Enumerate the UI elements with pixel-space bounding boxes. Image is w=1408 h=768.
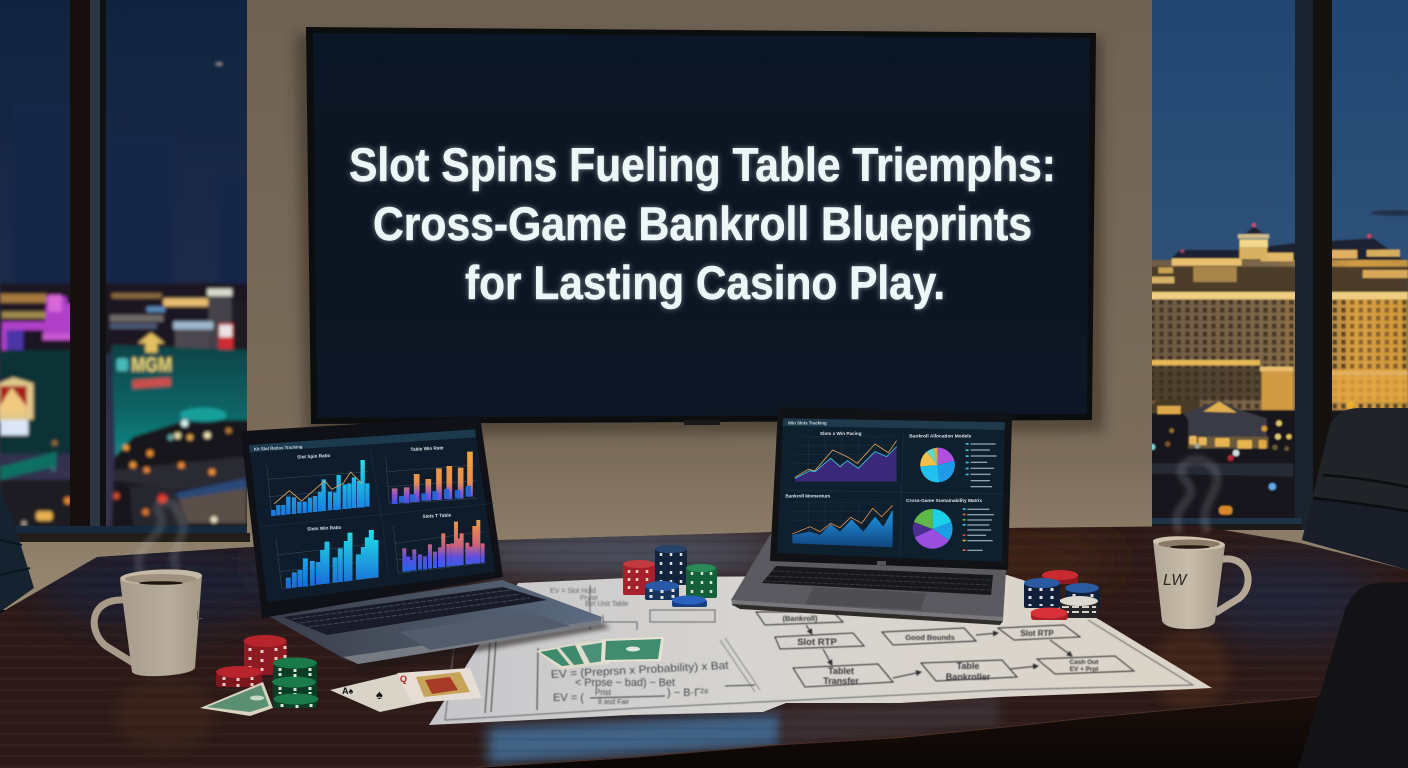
pie chart: allocation (909, 434, 997, 487)
blueprint formulas: 8 asd Fair (598, 699, 630, 706)
flowchart (756, 612, 1134, 687)
playing cards fan (536, 637, 664, 669)
line chart: spins: Slots x Win Pacing (820, 431, 862, 436)
pie chart: sustainability (906, 498, 994, 551)
title (349, 138, 1056, 309)
left window frame (0, 0, 250, 542)
coffee mug right: LW (1163, 572, 1188, 589)
background wall (0, 0, 1408, 610)
steam left (138, 502, 183, 572)
laptop right (731, 407, 1012, 625)
left window with MGM night view (0, 0, 253, 533)
title: for Lasting Casino Play. (465, 256, 945, 309)
chart: table wins: Table Win Rate (410, 445, 444, 452)
left casino sign (0, 377, 33, 435)
blueprint formulas: Prist (595, 688, 612, 697)
lower right chair (1298, 582, 1408, 768)
blueprint paper: Slot RTP (797, 637, 837, 648)
right upper chair (1302, 408, 1408, 570)
right window frame (1152, 0, 1332, 530)
steam right (1177, 459, 1217, 532)
blueprint formulas: EV = (Preprsn x Probability) x Bat (551, 660, 729, 681)
right chip stacks (1024, 570, 1100, 620)
table cards: Q (400, 674, 407, 684)
MGM lion sign (117, 333, 172, 389)
line chart: spins (795, 431, 897, 482)
left chair (0, 490, 34, 612)
MGM lion sign: MGM (131, 354, 172, 376)
wall display screen (306, 27, 1096, 425)
blueprint top-left notes (550, 585, 715, 630)
title: Slot Spins Fueling Table Triemphs: (349, 138, 1056, 191)
pie chart: allocation: Bankroll Allocation Models (909, 434, 972, 439)
pie chart: sustainability: Cross-Game Sustainability Matrix (906, 498, 982, 503)
table cards (200, 668, 482, 716)
chart: blue bars (276, 525, 379, 589)
right laptop keyboard (762, 566, 993, 595)
chart: blue bars: Slots Win Ratio (307, 525, 342, 532)
laptop left: Kit Slot Ratios Tracking (254, 444, 303, 452)
line chart: bankroll: Bankroll Momentum (785, 494, 830, 499)
blueprint top-left notes: Pryse (580, 595, 598, 602)
blueprint paper: EV + Prpl (1070, 666, 1099, 673)
blueprint top-left notes: EV = Slot Hold (550, 588, 596, 595)
right window with hotel view (1148, 0, 1408, 530)
blueprint paper: Cash Out (1070, 659, 1099, 666)
left laptop keyboard (283, 587, 547, 635)
chart: slot spins: Slot Spin Ratio (297, 453, 331, 460)
line chart: bankroll (785, 494, 893, 547)
title: Cross-Game Bankroll Blueprints (373, 197, 1032, 250)
laptop right: Win Slots Tracking (788, 420, 827, 425)
blueprint top-left notes: Bet Unit Table (585, 601, 629, 608)
coffee mug left (94, 568, 203, 676)
table cards: A♠ (342, 686, 353, 696)
table cards: ♠ (376, 687, 383, 702)
blueprint paper: Table (957, 661, 979, 671)
blueprint formulas: < Prpse − bad) − Bet (575, 677, 675, 689)
blueprint formulas: ) − B·Γ²⁸ (667, 687, 709, 699)
blueprint paper: Bankroller (946, 672, 991, 682)
laptop left (241, 417, 610, 672)
chart: mixed bars: Slots T Table (422, 512, 452, 519)
blueprint paper: (Bankroll) (782, 614, 818, 623)
blueprint paper: Tablet (828, 666, 854, 676)
left chip stacks (216, 635, 318, 709)
blueprint paper: Good Bounds (905, 633, 955, 642)
center chip stacks (623, 545, 717, 607)
blueprint paper: Transfer (823, 676, 859, 686)
coffee mug right (1153, 535, 1248, 629)
blueprint paper (429, 575, 1212, 725)
chart: mixed bars (393, 512, 486, 573)
blueprint formulas: EV = ( (553, 692, 584, 704)
conference table (0, 520, 1408, 768)
wall display shadow (296, 34, 1104, 436)
coffee mug left: L (196, 608, 203, 622)
blueprint formulas (551, 660, 729, 706)
hotel tower crown (1180, 223, 1372, 259)
chart: table wins (386, 445, 477, 504)
chart: slot spins (267, 453, 370, 516)
blueprint paper: Slot RTP (1020, 629, 1054, 638)
